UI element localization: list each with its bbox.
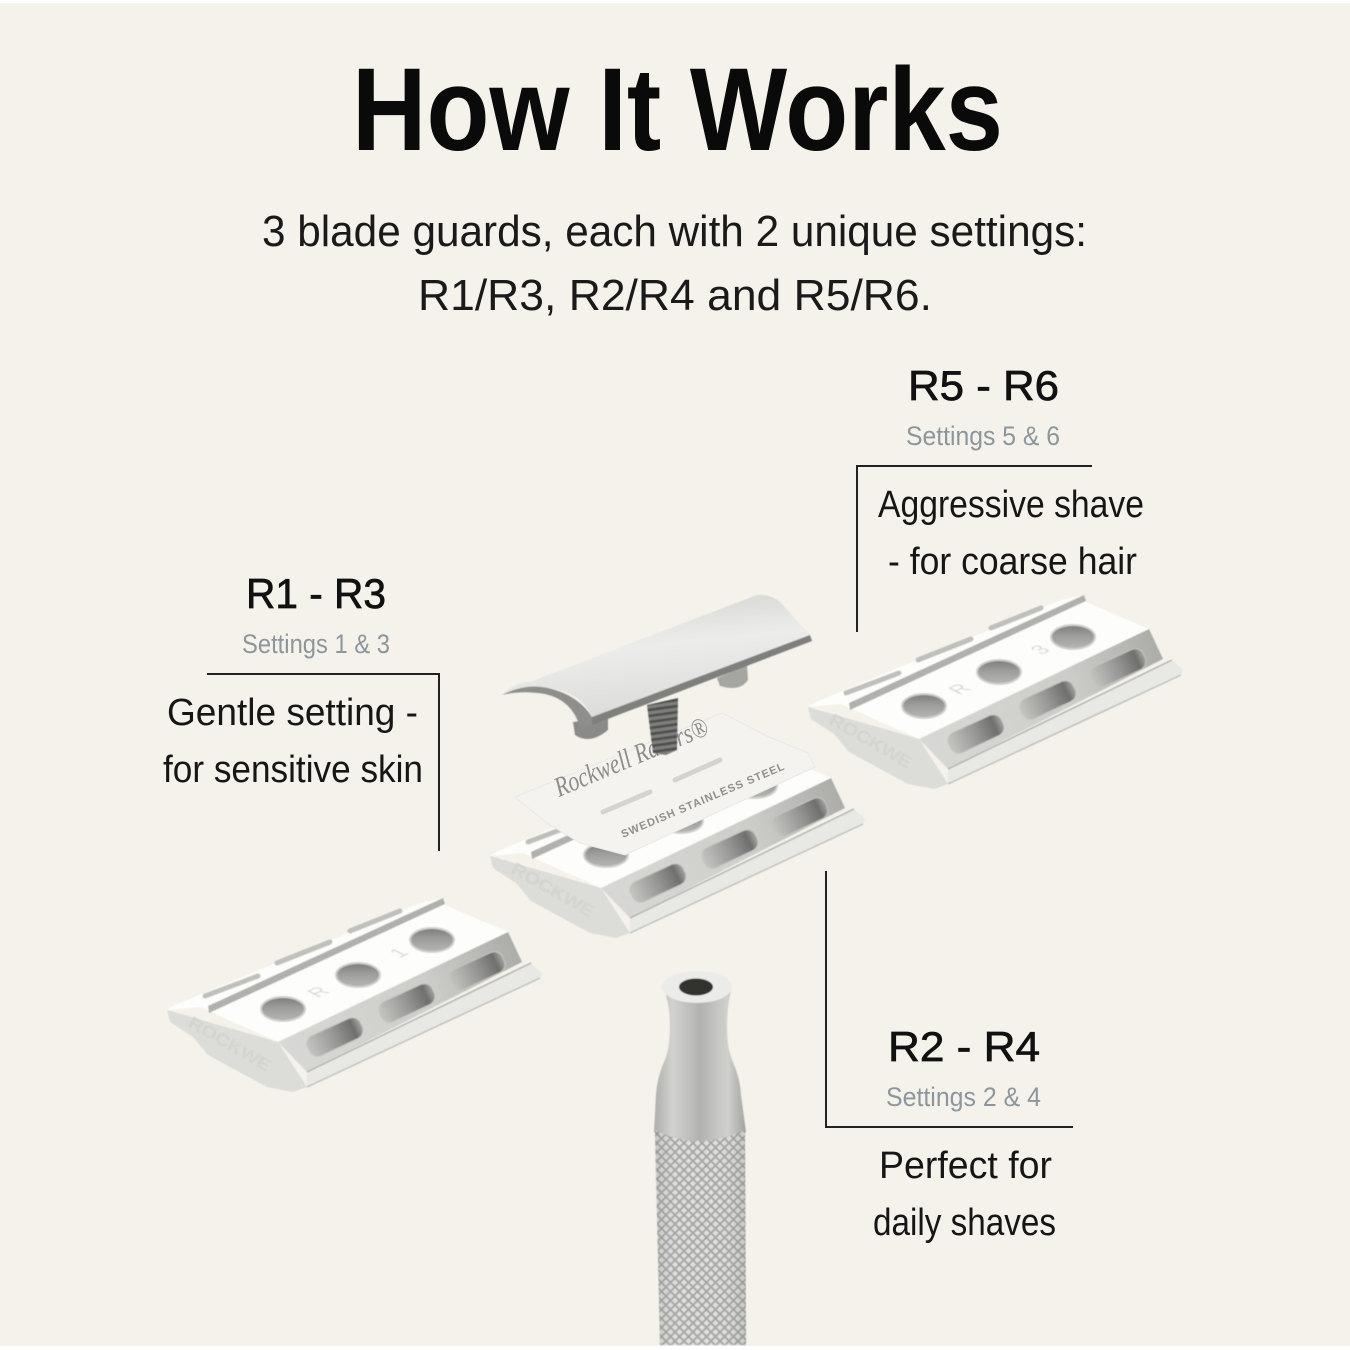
blade guard R1 R3	[167, 898, 542, 1092]
blade guard R5 R6	[808, 595, 1183, 789]
handle top ring	[662, 971, 732, 1003]
description: aggressive shave: Aggressive shave	[878, 484, 1144, 526]
callout: R2 - R4	[826, 871, 1073, 1244]
callout: R1 - R3	[163, 570, 439, 851]
subtitle	[262, 207, 1087, 320]
description: perfect for daily shaves: Perfect for	[879, 1145, 1052, 1187]
callout: R5 - R6	[857, 362, 1144, 632]
heading: R1 - R3: R1 - R3	[246, 570, 386, 617]
subtitle: 3 blade guards, each with 2 unique settings:	[262, 207, 1087, 256]
left foot	[573, 718, 608, 739]
caption: settings 1 and 3: Settings 1 & 3	[242, 629, 390, 659]
blade guard R5 R6: R	[944, 681, 976, 697]
caption: settings 2 and 4: Settings 2 & 4	[886, 1082, 1041, 1112]
threaded hole	[679, 978, 713, 996]
top cap with screw	[502, 595, 812, 755]
blade guard R2 R4: ROCKWE	[508, 859, 597, 921]
bracket line: R2 - R4	[826, 871, 1073, 1127]
blade guard R1 R3: R	[303, 984, 335, 1000]
description: perfect for daily shaves	[873, 1145, 1056, 1244]
cap front edge	[592, 635, 812, 725]
razor blade: Rockwell Razors®	[549, 712, 713, 804]
cap surface	[502, 595, 812, 717]
razor handle	[654, 971, 746, 1345]
description: perfect for daily shaves: daily shaves	[873, 1202, 1056, 1244]
bracket line: R5 - R6	[857, 466, 1092, 632]
blade guard R5 R6: ROCKWE	[826, 710, 915, 772]
right foot	[717, 665, 748, 688]
screw	[647, 698, 678, 755]
blade guard R1 R3: ROCKWE	[185, 1013, 274, 1075]
heading: R5 - R6: R5 - R6	[908, 362, 1059, 409]
bracket line: R1 - R3	[207, 674, 439, 851]
description: gentle setting: Gentle setting -	[167, 692, 418, 734]
subtitle: R1/R3, R2/R4 and R5/R6.	[418, 271, 932, 320]
title: How It Works	[352, 44, 1003, 176]
blade guard R5 R6: 3	[1026, 643, 1056, 657]
description: gentle setting	[163, 692, 423, 791]
description: aggressive shave	[878, 484, 1144, 583]
blade guard R2 R4	[490, 744, 865, 938]
razor blade	[515, 712, 815, 855]
handle neck	[654, 986, 746, 1141]
razor blade: SWEDISH STAINLESS STEEL	[619, 761, 786, 841]
heading: R2 - R4: R2 - R4	[888, 1023, 1040, 1070]
blade guard R1 R3: 1	[385, 946, 415, 960]
description: aggressive shave: - for coarse hair	[888, 541, 1137, 583]
cap left end	[502, 687, 592, 727]
description: gentle setting: for sensitive skin	[163, 749, 423, 791]
caption: settings 5 and 6: Settings 5 & 6	[906, 421, 1060, 451]
knurled grip	[655, 1130, 746, 1345]
